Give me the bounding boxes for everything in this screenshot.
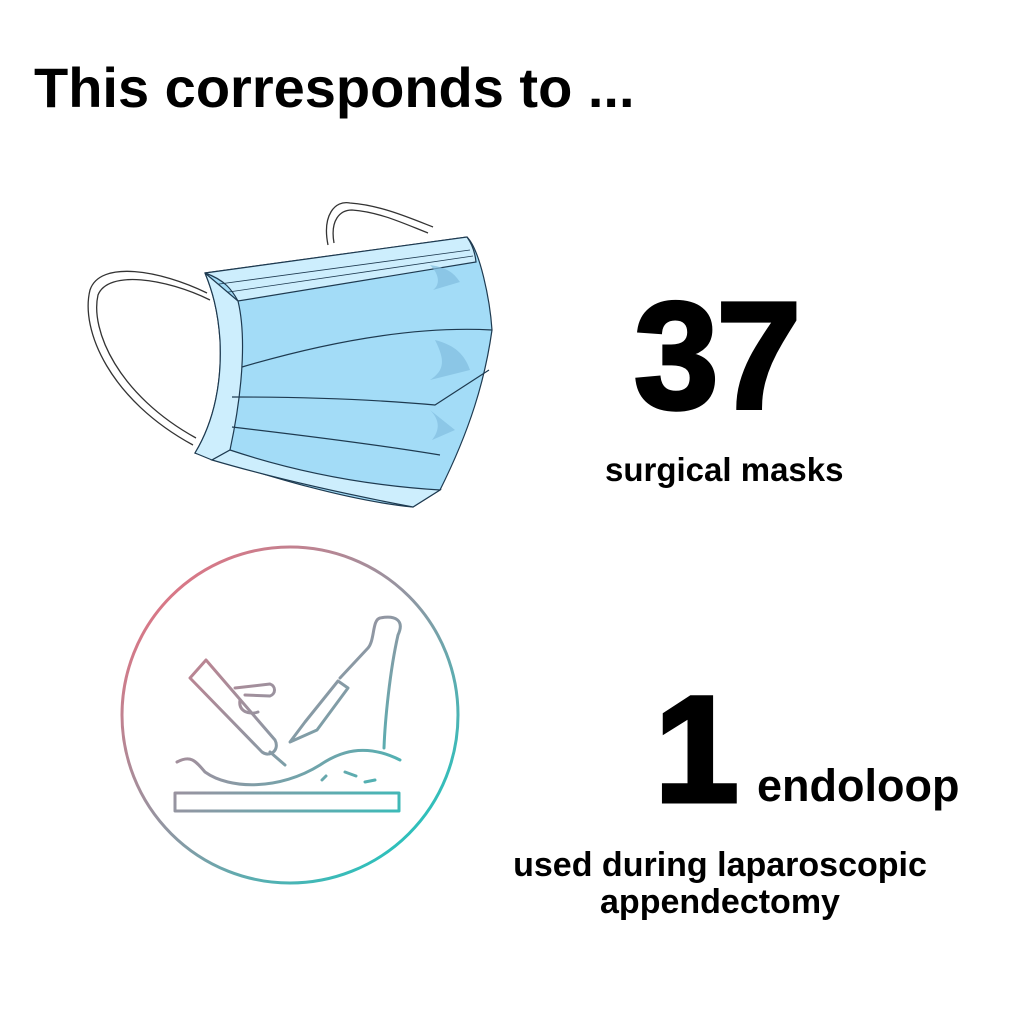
- label: surgical masks: surgical masks: [605, 451, 843, 488]
- text: used during laparoscopic appendectomy: used during laparoscopic: [513, 846, 927, 884]
- label: endoloop: endoloop: [757, 760, 959, 811]
- number: 1: 1: [655, 665, 738, 833]
- number: 37: 37: [634, 271, 799, 441]
- text: used during laparoscopic appendectomy: appendectomy: [600, 883, 840, 921]
- icon: laparoscopic surgery circle: [120, 546, 460, 884]
- icon: surgical mask: [87, 202, 493, 508]
- text: used during laparoscopic appendectomy: [513, 846, 927, 921]
- title: This corresponds to ...: [34, 56, 635, 119]
